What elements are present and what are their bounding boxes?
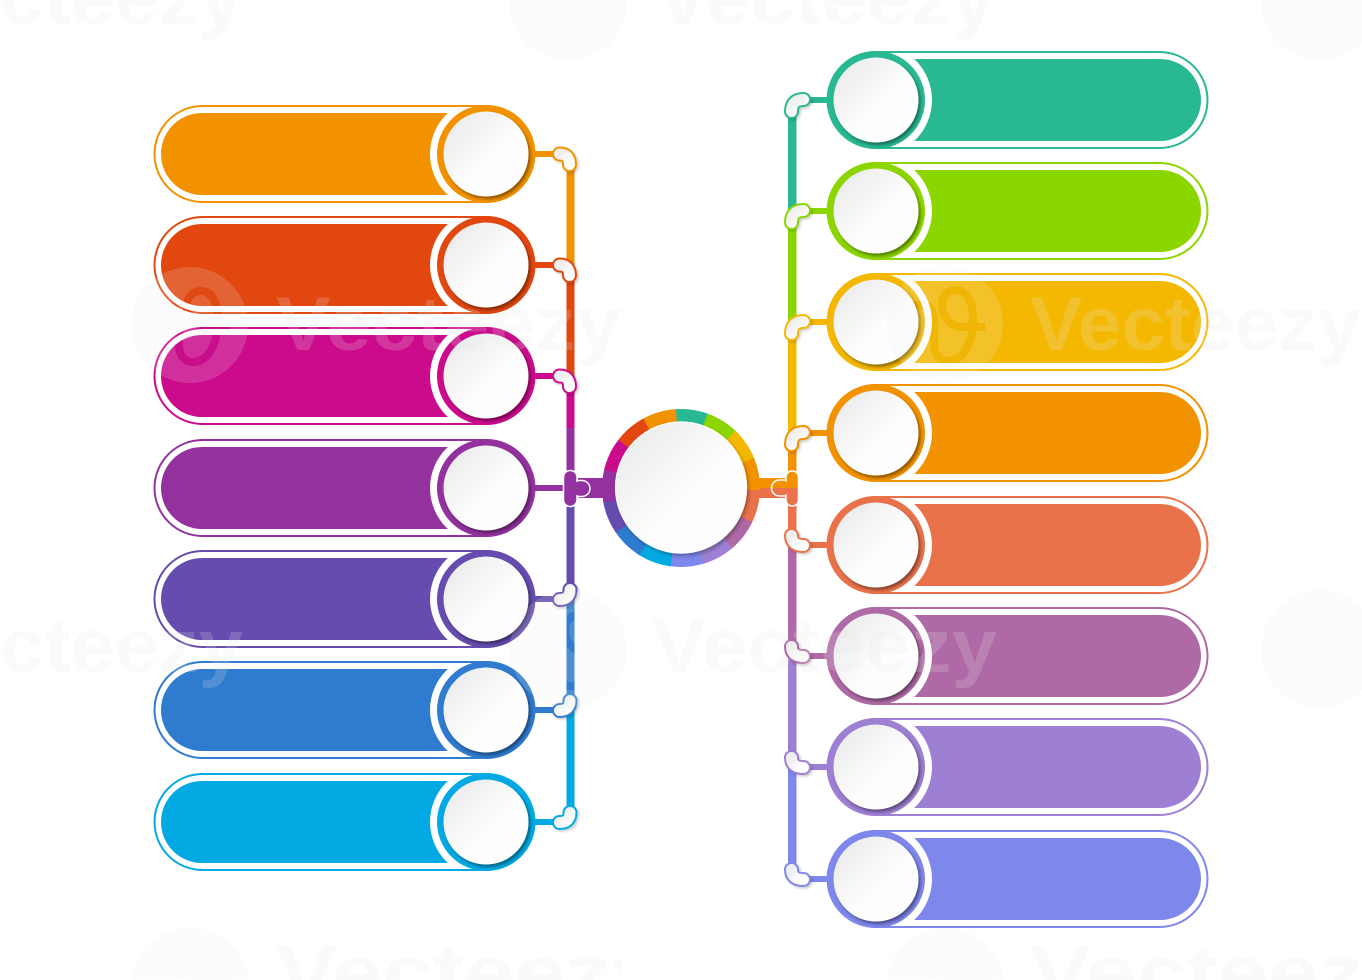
right row 5: coral pill: [792, 489, 1208, 601]
central hub ring: 15 colored segments: [579, 386, 783, 590]
right hub connector: [757, 471, 798, 506]
left row 3: magenta pill: [154, 320, 570, 432]
right row 7: lilac pill: [792, 711, 1208, 823]
left row 1: orange pill: [154, 98, 570, 210]
right row 3: yellow pill: [792, 266, 1208, 378]
left hub connector: [564, 470, 606, 506]
right row 2: green pill: [792, 155, 1208, 267]
right row 8: periwinkle pill: [792, 823, 1208, 935]
left row 6: blue pill: [154, 654, 570, 766]
left vertical connector line: [566, 162, 574, 815]
right vertical connector line: [788, 108, 796, 872]
left row 5: indigo pill: [154, 543, 570, 655]
watermark overlay: Vecteezy: [652, 604, 997, 689]
left row 4: purple pill: [154, 432, 564, 544]
right row 4: orange pill: [792, 377, 1208, 489]
right row 1: teal pill: [792, 44, 1208, 156]
watermark overlay: cteezy: [0, 604, 243, 689]
watermark overlay: Vecteezy: [276, 282, 621, 367]
watermark overlay: Vecteezy: [1030, 282, 1361, 367]
left row 7: cyan pill: [154, 766, 570, 878]
right row 6: mauve pill: [792, 600, 1208, 712]
left row 2: red pill: [154, 209, 570, 321]
watermark overlay: [154, 267, 1208, 706]
central hub disc: [616, 422, 746, 553]
infographic canvas: [154, 51, 1208, 928]
